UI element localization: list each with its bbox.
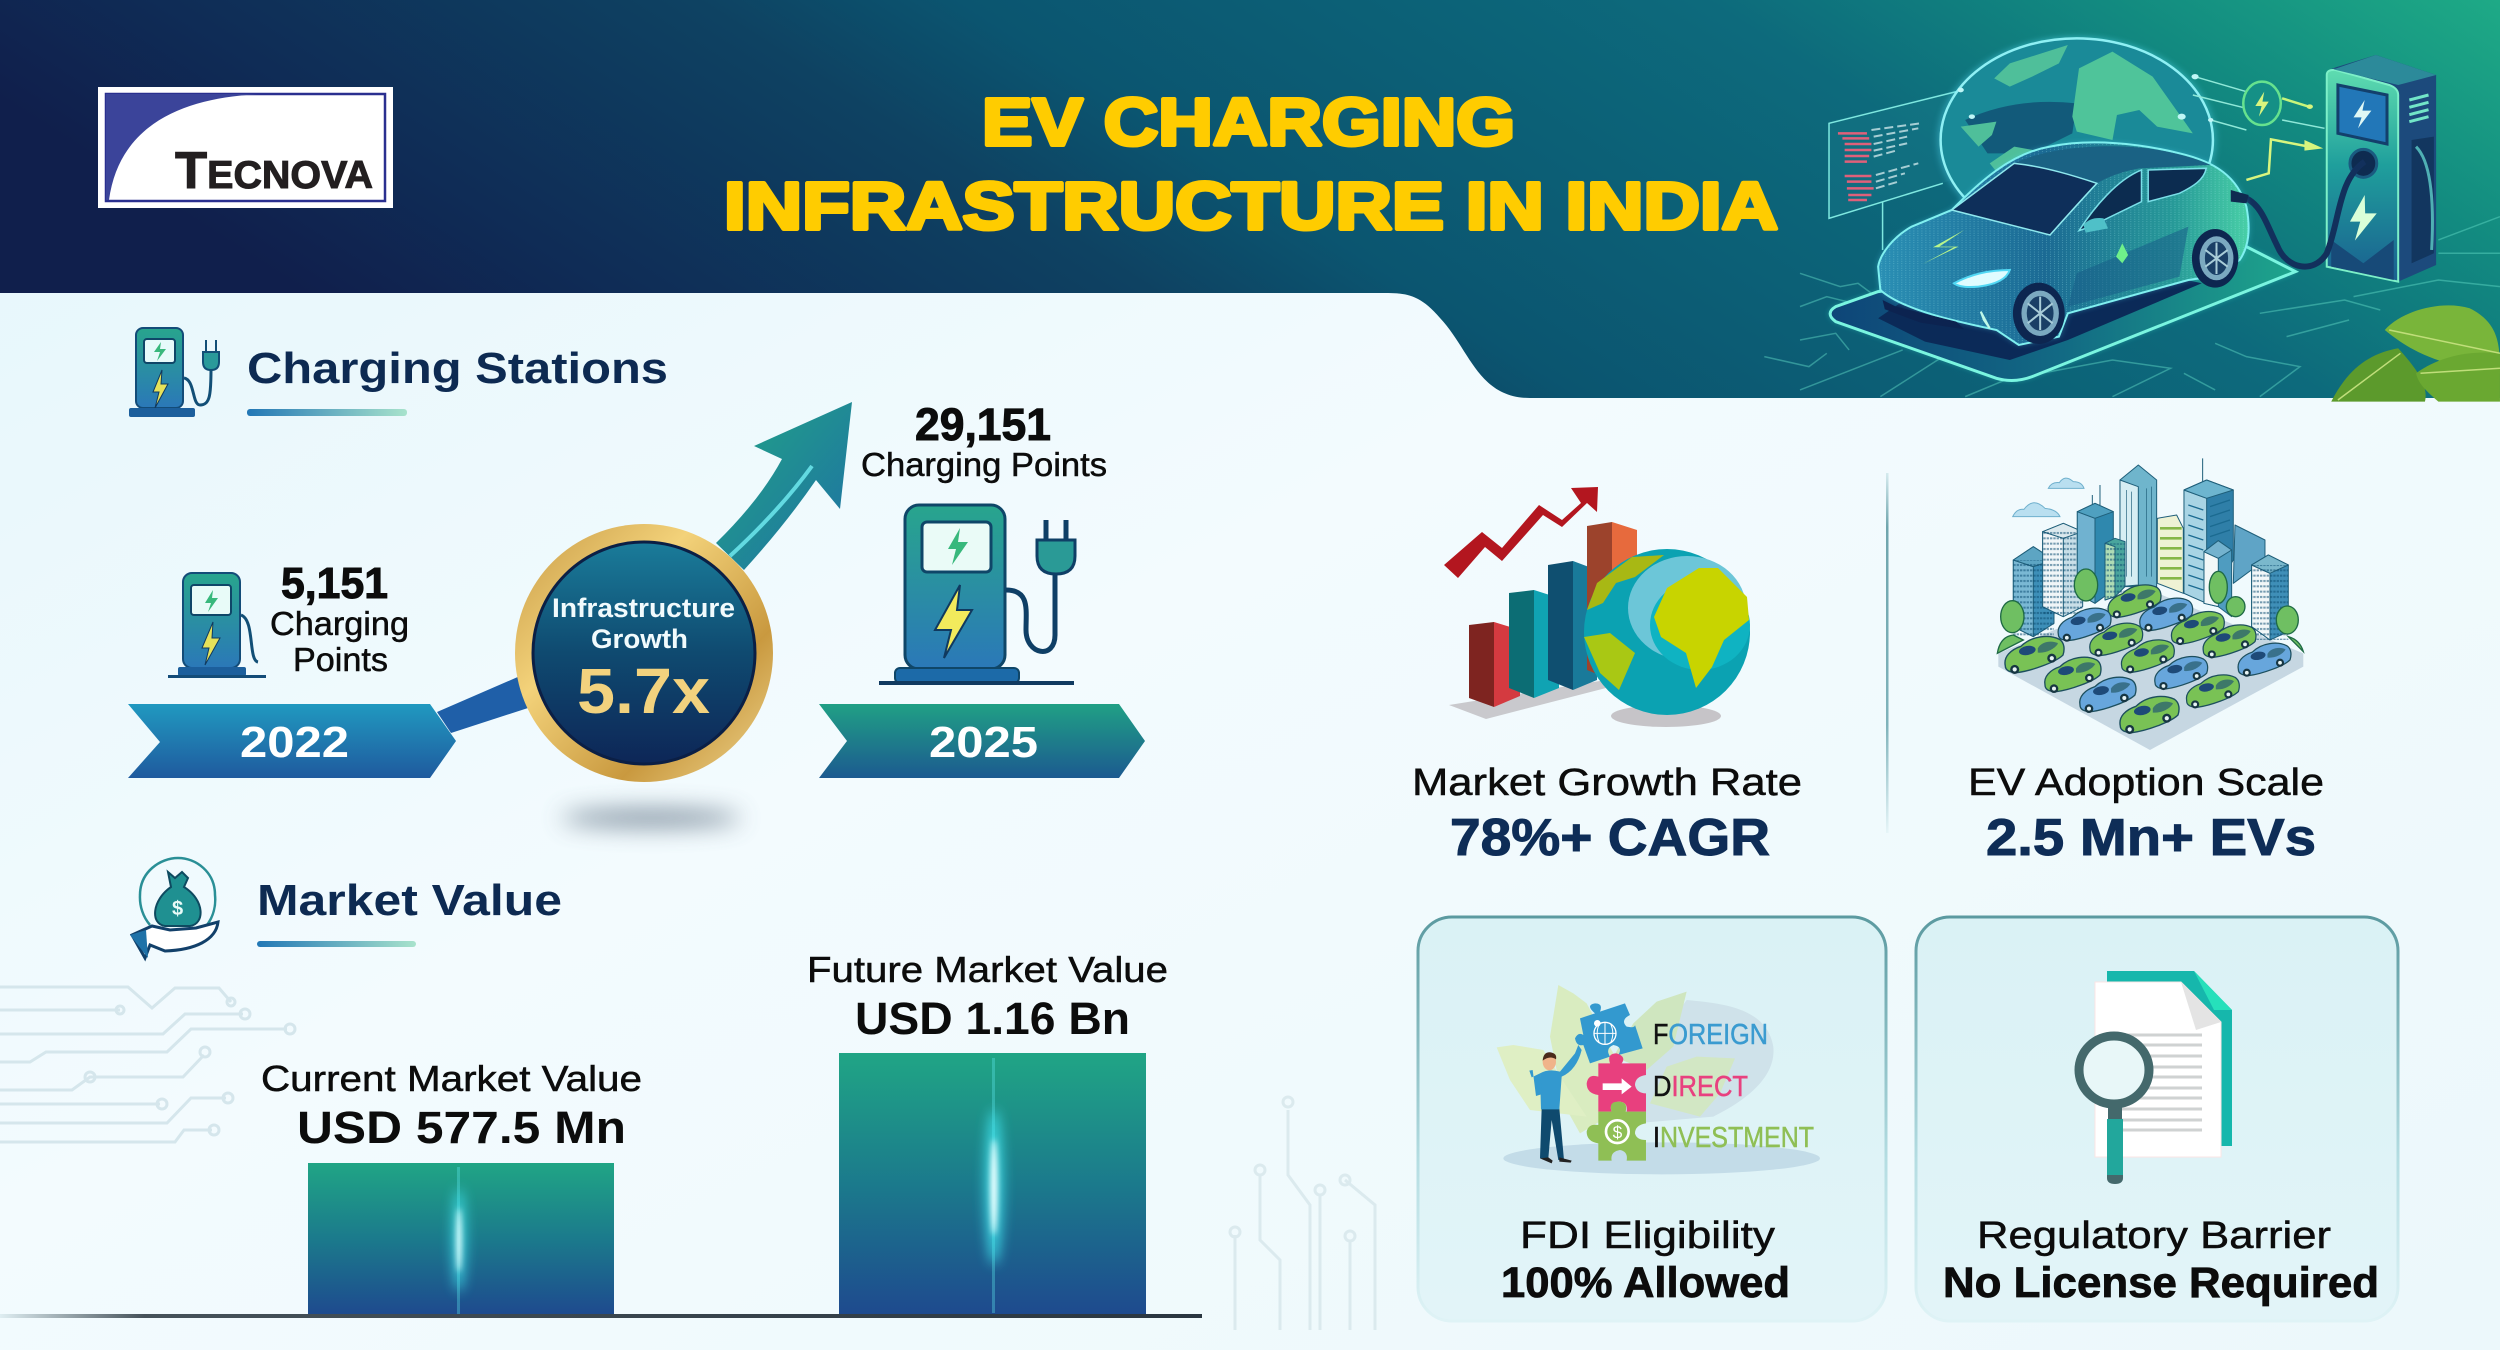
label: FDI eligibility: FDI Eligibility [1520, 1215, 1775, 1257]
medallion: infrastructure growth 5.7x: Growth [591, 624, 688, 654]
title: INFRASTRUCTURE IN INDIA [724, 169, 1778, 244]
stat: 5,151 charging points: 5,151 [281, 559, 388, 608]
logo: Tecnova [98, 87, 393, 208]
bar: future market value [839, 1053, 1146, 1315]
circuit traces [1764, 217, 2500, 397]
decorative circuit lines, centre [1230, 1097, 1375, 1330]
bar: current market value [308, 1163, 614, 1315]
trees [1997, 569, 2303, 653]
charging cable [2233, 162, 2365, 267]
icon: bar chart and globe [1444, 487, 1750, 727]
stat: 5,151 charging points: Points [293, 641, 388, 678]
red bar [1469, 622, 1520, 707]
medallion: infrastructure growth 5.7x [515, 524, 773, 782]
logo: Tecnova: TECNOVA [175, 142, 373, 200]
clouds [2013, 478, 2084, 517]
panel: regulatory barrier card [1916, 917, 2398, 1321]
skyscrapers [2013, 458, 2288, 640]
growth arrow upper segment [716, 402, 852, 570]
energy flow and lines [1958, 74, 2325, 180]
growth arrow lower segment [437, 676, 528, 733]
text: foreign direct investment: INVESTMENT [1653, 1122, 1814, 1154]
icon: charging pump heading [129, 328, 219, 417]
icon: small charging pump [168, 573, 266, 678]
value: 78% CAGR: 78%+ CAGR [1450, 809, 1770, 867]
icon: money bag in hand: $ [172, 898, 183, 920]
heading: market value: Market Value [257, 876, 562, 925]
decorative circuit lines, left [0, 987, 295, 1142]
panel: market value [0, 858, 1375, 1330]
icon: city with EV parking [1997, 458, 2303, 750]
label: future market value [807, 949, 1168, 1044]
globe [1584, 549, 1750, 715]
blue puzzle piece [1575, 1003, 1643, 1063]
axis line [0, 1314, 1202, 1318]
glowing globe [1937, 36, 2216, 244]
stat: 29,151 charging points: 29,151 [915, 399, 1051, 450]
divider [1886, 473, 1888, 833]
medallion: infrastructure growth 5.7x: 5.7x [577, 655, 710, 727]
green puzzle piece [1587, 1102, 1646, 1161]
teal bar [1509, 590, 1559, 698]
icon: document and magnifier [2079, 971, 2232, 1184]
icon: large charging pump [879, 505, 1075, 685]
label: future market value: USD 1.16 Bn [855, 993, 1130, 1044]
icon: FDI puzzle illustration [1497, 985, 1820, 1174]
panel: market growth rate [1412, 487, 1802, 867]
panel: EV adoption scale [1968, 458, 2324, 867]
heading: charging stations: Charging Stations [247, 344, 668, 393]
stat: 5,151 charging points [270, 559, 409, 678]
orange bar [1587, 522, 1637, 680]
label: regulatory barrier: Regulatory Barrier [1977, 1215, 2331, 1257]
stat: 29,151 charging points: Charging Points [861, 446, 1107, 483]
text: foreign direct investment [1653, 1019, 1814, 1154]
label: current market value: USD 577.5 Mn [297, 1102, 626, 1153]
value: 2.5 Mn EVs: 2.5 Mn+ EVs [1986, 809, 2316, 867]
header band [0, 0, 2500, 398]
heading underline [247, 409, 407, 416]
panel: charging stations [128, 328, 1145, 827]
text: foreign direct investment: FOREIGN [1653, 1019, 1768, 1051]
text: foreign direct investment: DIRECT [1653, 1071, 1748, 1103]
2022 banner: 2022 [240, 718, 349, 767]
medallion: infrastructure growth 5.7x: Infrastructure [552, 593, 735, 623]
heading underline [257, 941, 416, 947]
label: future market value: Future Market Value [807, 949, 1168, 990]
pink puzzle piece [1587, 1053, 1646, 1112]
2025 banner [819, 704, 1145, 778]
label: current market value [261, 1058, 642, 1153]
medallion shadow [561, 809, 741, 827]
label: current market value: Current Market Value [261, 1058, 642, 1099]
glowing charging pad [1830, 247, 2296, 380]
title: EV CHARGING [982, 85, 1515, 160]
parked electric cars [2005, 585, 2291, 734]
leaves [2331, 305, 2500, 402]
charging station [2327, 55, 2436, 282]
blue bar [1548, 561, 1597, 690]
title [724, 85, 1778, 244]
value: no license required: No License Required [1943, 1259, 2379, 1307]
2025 banner: 2025 [929, 718, 1038, 767]
label: EV adoption scale: EV Adoption Scale [1968, 762, 2324, 804]
label: market growth rate: Market Growth Rate [1412, 762, 1802, 804]
glowing data panel [1829, 88, 1963, 250]
2022 banner [128, 704, 456, 778]
red rising arrow [1444, 487, 1598, 578]
green puzzle piece: $ [1613, 1122, 1623, 1142]
value: 100% allowed: 100% Allowed [1501, 1259, 1790, 1307]
car [1878, 142, 2249, 345]
panel: FDI eligibility card [1418, 917, 1886, 1321]
person [1529, 1045, 1582, 1163]
illustration: electric car charging [1764, 36, 2500, 402]
icon: money bag in hand [130, 858, 218, 958]
stat: 5,151 charging points: Charging [270, 605, 409, 642]
stat: 29,151 charging points [861, 399, 1107, 483]
